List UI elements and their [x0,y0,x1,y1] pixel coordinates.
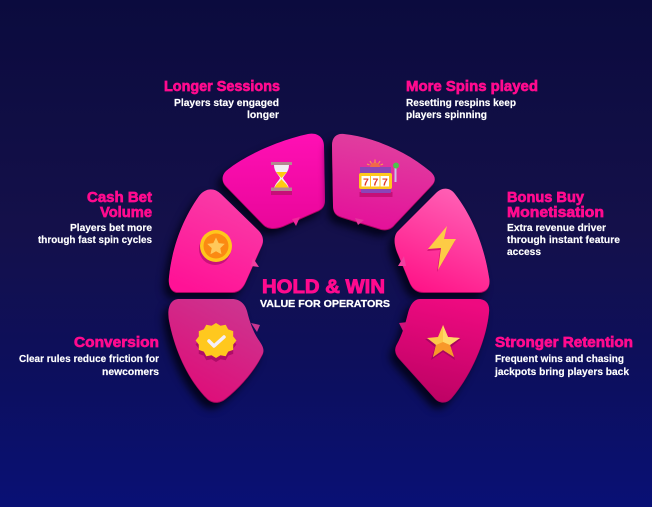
icon: slot machine: 7 [363,176,369,188]
card: bonus buy monetisation [395,189,490,292]
text: stronger retention: Stronger Retention [495,334,633,351]
panel: more spins played [332,134,435,229]
text: longer sessions [164,78,280,121]
icon: slot machine [359,160,399,197]
text: conversion: Clear rules reduce friction for [19,354,159,365]
pointer: stronger retention [399,322,408,331]
pointer: conversion [251,323,260,332]
icon: coin [199,230,232,265]
pointer: more spins played [355,218,364,225]
text: cash bet volume: Volume [100,204,152,221]
card: stronger retention [395,299,489,402]
text: longer sessions: Longer Sessions [164,78,280,95]
card: conversion [168,299,263,402]
pointer: cash bet volume [251,258,259,267]
text: bonus buy monetisation [507,189,621,258]
text: bonus buy monetisation: through instant feature [507,235,621,246]
text: bonus buy monetisation: Extra revenue driver [507,223,606,234]
text: cash bet volume: Players bet more [70,223,153,234]
icon: slot machine: 7 [372,176,378,188]
title: hold and win: HOLD & WIN [262,277,385,298]
card: longer sessions [223,134,325,228]
text: bonus buy monetisation: access [507,247,542,258]
pointer: longer sessions [292,217,300,226]
text: stronger retention: jackpots bring players back [494,367,630,378]
panel: longer sessions [223,134,325,228]
text: bonus buy monetisation: Monetisation [507,204,604,221]
text: more spins played [406,78,538,121]
icon: star [425,325,461,360]
text: cash bet volume [38,189,153,246]
icon: slot machine: 7 [382,176,388,188]
text: conversion [19,334,160,378]
text: more spins played: players spinning [406,110,487,121]
panel: cash bet volume [169,189,263,292]
text: stronger retention [494,334,633,378]
subtitle: VALUE FOR OPERATORS [260,298,390,310]
text: longer sessions: Players stay engaged [174,98,279,109]
text: bonus buy monetisation: Bonus Buy [507,189,585,206]
card: cash bet volume [169,189,263,292]
text: cash bet volume: Cash Bet [87,189,152,206]
icon: lightning bolt [427,226,456,272]
text: more spins played: More Spins played [406,78,538,95]
icon: hourglass [271,162,292,195]
text: conversion: newcomers [102,367,160,378]
text: longer sessions: longer [247,110,279,121]
pointer: bonus buy monetisation [398,256,406,266]
card: more spins played [332,134,435,229]
text: more spins played: Resetting respins keep [406,98,516,109]
panel: stronger retention [395,299,489,402]
panel: conversion [168,299,263,402]
title [260,277,390,310]
icon: badge check [196,323,236,362]
text: stronger retention: Frequent wins and chasing [495,354,624,365]
text: conversion: Conversion [74,334,159,351]
panel: bonus buy monetisation [395,189,490,292]
text: cash bet volume: through fast spin cycles [38,235,153,246]
